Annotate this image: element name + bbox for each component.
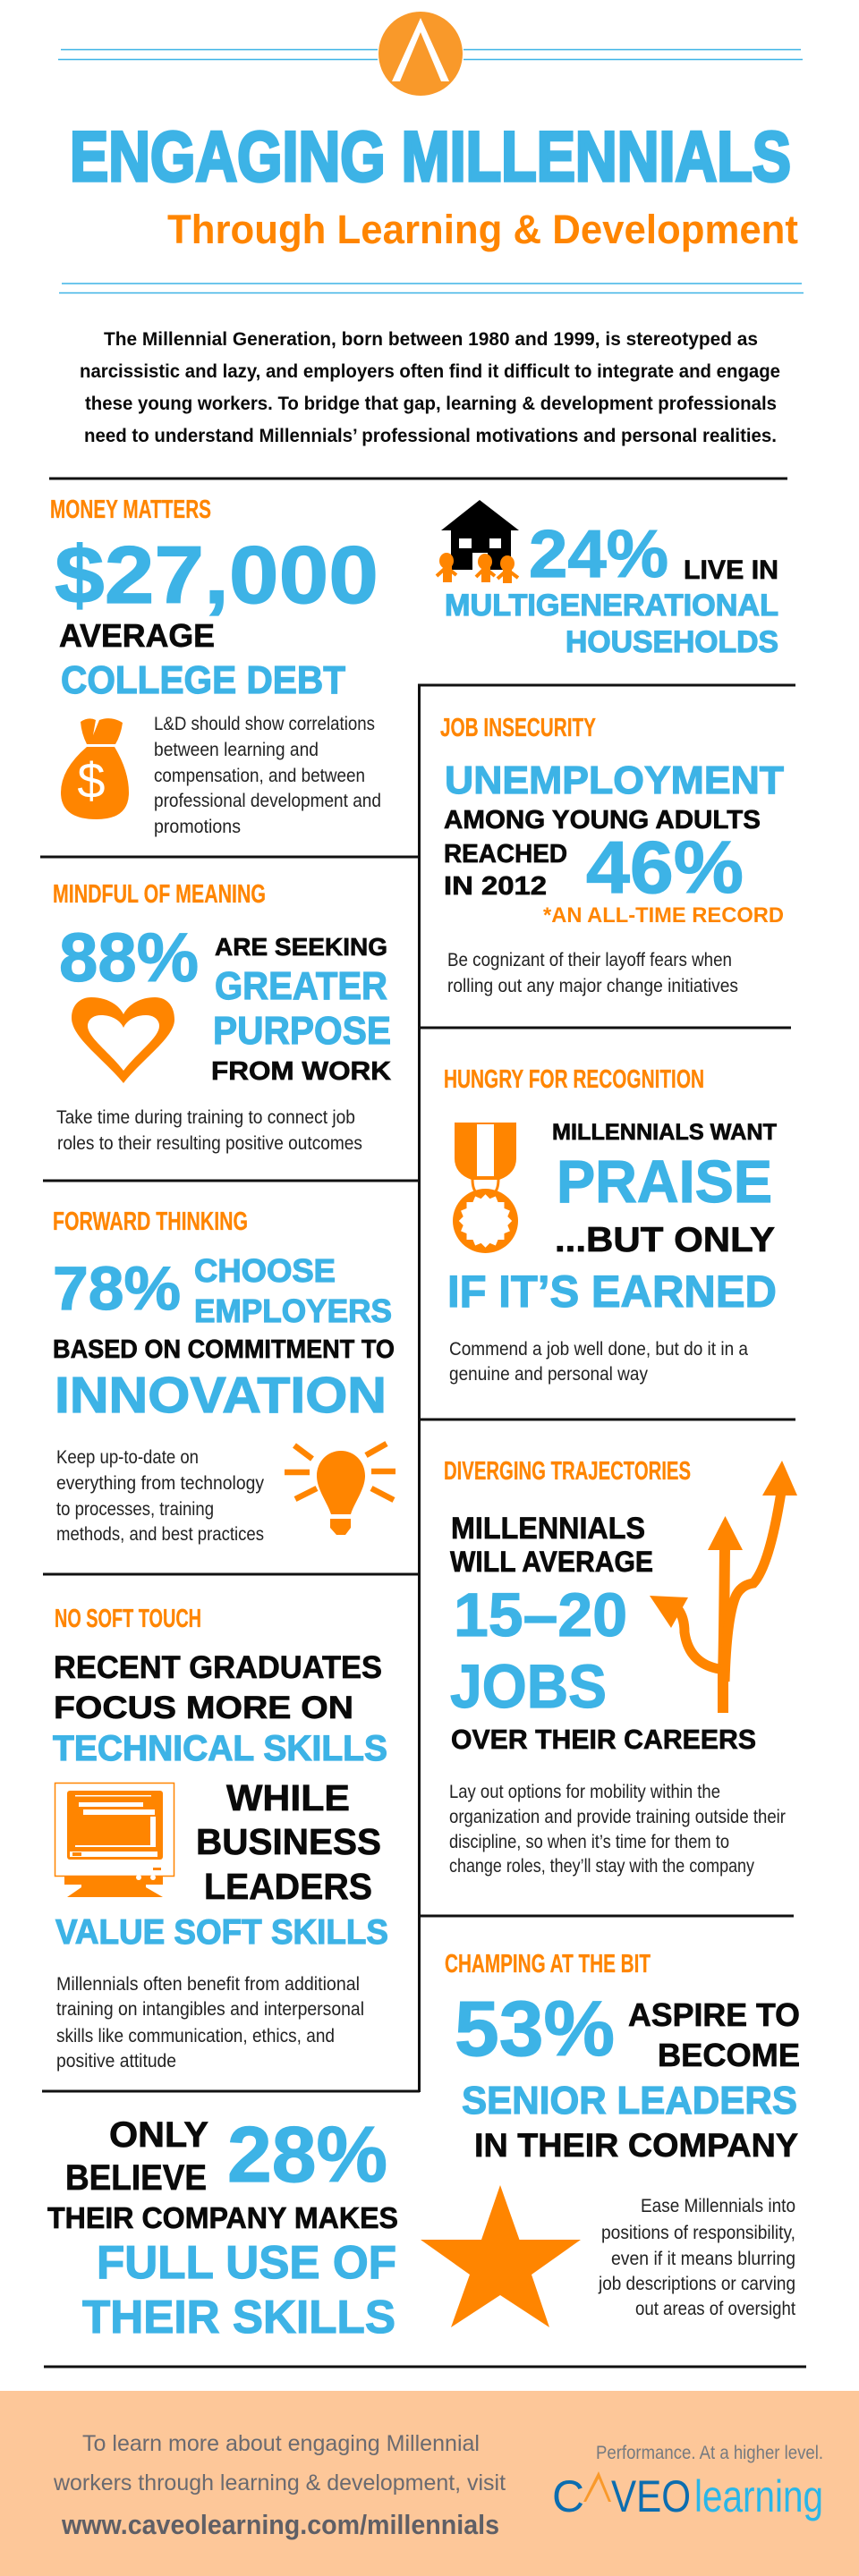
body text: money matters: promotions <box>154 817 241 837</box>
icon: money bag: $ <box>77 752 106 809</box>
body text: hungry for recognition <box>449 1339 748 1385</box>
label: from work: FROM WORK <box>211 1057 391 1086</box>
body text: diverging trajectories: discipline, so when it’s time for them to <box>449 1832 729 1852</box>
body text: forward thinking: methods, and best practices <box>56 1524 264 1545</box>
body text: money matters: L&D should show correlations <box>154 714 375 734</box>
label: multigenerational: MULTIGENERATIONAL <box>445 589 778 623</box>
stat: $27,000: $27,000 <box>55 530 378 621</box>
heading: mindful of meaning: MINDFUL OF MEANING <box>53 880 266 909</box>
label: employers: EMPLOYERS <box>194 1292 392 1329</box>
label: average: AVERAGE <box>59 617 215 654</box>
label: business: BUSINESS <box>196 1821 381 1862</box>
panel: money matters <box>50 496 381 837</box>
body text: job insecurity <box>447 950 738 996</box>
heading: hungry for recognition: HUNGRY FOR RECOGNITION <box>444 1065 704 1094</box>
icon: computer monitor <box>55 1784 174 1897</box>
intro text block: need to understand Millennials’ professional motivations and personal realities. <box>84 426 777 446</box>
panel: job insecurity <box>440 714 784 996</box>
label: purpose: PURPOSE <box>213 1009 391 1053</box>
label: households: HOUSEHOLDS <box>566 625 778 659</box>
body text: mindful of meaning: roles to their resulting positive outcomes <box>57 1133 362 1154</box>
note: all-time record: *AN ALL-TIME RECORD <box>543 903 784 928</box>
label: based on commitment to: BASED ON COMMITMENT TO <box>53 1335 395 1364</box>
body text: money matters <box>154 714 381 837</box>
label: millennials: MILLENNIALS <box>451 1512 645 1546</box>
label: technical skills: TECHNICAL SKILLS <box>53 1729 387 1768</box>
intro text block <box>80 329 780 446</box>
body text: no soft touch: skills like communication, ethics, and <box>56 2026 335 2046</box>
label: will average: WILL AVERAGE <box>450 1546 653 1578</box>
heading: forward thinking: FORWARD THINKING <box>53 1208 248 1236</box>
panel: diverging trajectories <box>444 1457 797 1877</box>
icon: diverging arrows <box>650 1461 797 1713</box>
body text: no soft touch: Millennials often benefit from additional <box>56 1974 360 1995</box>
intro text block: these young workers. To bridge that gap, learning & development professionals <box>85 394 777 414</box>
intro text block: narcissistic and lazy, and employers often find it difficult to integrate and engage <box>80 361 780 382</box>
body text: champing at the bit: even if it means blurring <box>611 2249 795 2269</box>
body text: champing at the bit: out areas of oversight <box>635 2299 795 2319</box>
label: but only: ...BUT ONLY <box>555 1221 775 1259</box>
heading: job insecurity: JOB INSECURITY <box>440 714 596 742</box>
label: live in: LIVE IN <box>684 555 778 585</box>
footer url: www.caveolearning.com/millennials <box>61 2509 499 2540</box>
panel: mindful of meaning <box>53 880 391 1154</box>
footer text: workers through learning & development, visit <box>53 2470 506 2496</box>
label: are seeking: ARE SEEKING <box>215 933 387 961</box>
label: full use of: FULL USE OF <box>97 2237 396 2289</box>
label: in 2012: IN 2012 <box>444 872 547 901</box>
body text: job insecurity: rolling out any major change initiatives <box>447 976 738 996</box>
label: senior leaders: SENIOR LEADERS <box>462 2079 797 2123</box>
label: become: BECOME <box>658 2037 800 2073</box>
body text: money matters: professional development and <box>154 791 381 811</box>
body text: no soft touch: positive attitude <box>56 2051 176 2072</box>
label: focus more on: FOCUS MORE ON <box>54 1690 353 1725</box>
tagline: Performance. At a higher level. <box>596 2443 823 2463</box>
body text: no soft touch: training on intangibles and interpersonal <box>56 1999 364 2020</box>
label: value soft skills: VALUE SOFT SKILLS <box>55 1913 388 1952</box>
label: college debt: COLLEGE DEBT <box>61 659 345 702</box>
stat: 15-20: 15–20 <box>454 1580 627 1649</box>
body text: money matters: compensation, and between <box>154 766 365 786</box>
heading: diverging trajectories: DIVERGING TRAJECTORIES <box>444 1457 691 1486</box>
panel: full use of skills <box>47 2110 398 2343</box>
body text: champing at the bit: Ease Millennials into <box>641 2196 795 2216</box>
label: their skills: THEIR SKILLS <box>82 2292 395 2343</box>
label: believe: BELIEVE <box>65 2158 207 2198</box>
logo: caveo learning: learning <box>694 2471 823 2521</box>
body text: champing at the bit: job descriptions or carving <box>598 2274 795 2294</box>
logo: caveo learning: C <box>552 2471 584 2521</box>
body text: champing at the bit <box>598 2196 795 2319</box>
label: aspire to: ASPIRE TO <box>628 1996 800 2033</box>
heading: no soft touch: NO SOFT TOUCH <box>55 1605 201 1633</box>
logo: caveo learning: VEO <box>611 2471 691 2521</box>
icon: money bag <box>61 718 129 819</box>
label: leaders: LEADERS <box>204 1866 372 1907</box>
icon: medal <box>453 1123 518 1253</box>
body text: mindful of meaning <box>56 1107 362 1154</box>
label: over their careers: OVER THEIR CAREERS <box>451 1724 756 1755</box>
body text: diverging trajectories: Lay out options for mobility within the <box>449 1782 720 1802</box>
panel: no soft touch <box>53 1605 388 2072</box>
body text: mindful of meaning: Take time during training to connect job <box>56 1107 355 1128</box>
icon: star <box>421 2185 581 2327</box>
label: among young adults: AMONG YOUNG ADULTS <box>444 806 761 835</box>
subtitle: Through Learning & Development <box>167 207 798 252</box>
icon: light bulb <box>285 1444 395 1535</box>
label: if it's earned: IF IT’S EARNED <box>447 1267 777 1317</box>
stat: 53%: 53% <box>455 1986 615 2072</box>
body text: hungry for recognition: Commend a job well done, but do it in a <box>449 1339 748 1360</box>
body text: no soft touch <box>56 1974 364 2072</box>
panel: multigenerational households <box>437 500 778 659</box>
label: unemployment: UNEMPLOYMENT <box>445 758 784 802</box>
label: only: ONLY <box>109 2115 208 2155</box>
heading: money matters: MONEY MATTERS <box>50 496 211 524</box>
panel: forward thinking <box>53 1208 395 1545</box>
label: reached: REACHED <box>444 840 567 869</box>
divider rules <box>40 478 806 2368</box>
label: their company makes: THEIR COMPANY MAKES <box>47 2201 398 2234</box>
body text: diverging trajectories: change roles, they’ll stay with the company <box>449 1856 754 1877</box>
icon: house with family <box>437 500 519 583</box>
body text: hungry for recognition: genuine and personal way <box>449 1364 648 1385</box>
panel: footer <box>0 2391 859 2576</box>
footer text: To learn more about engaging Millennial <box>82 2431 480 2456</box>
panel: champing at the bit <box>421 1950 800 2327</box>
stat: 28%: 28% <box>227 2110 387 2199</box>
stat: 46%: 46% <box>586 826 744 909</box>
body text: job insecurity: Be cognizant of their layoff fears when <box>447 950 732 970</box>
heading: champing at the bit: CHAMPING AT THE BIT <box>445 1950 651 1979</box>
label: choose: CHOOSE <box>194 1252 336 1289</box>
label: jobs: JOBS <box>450 1652 607 1721</box>
footer text <box>53 2431 506 2496</box>
label: in their company: IN THEIR COMPANY <box>474 2127 798 2164</box>
body text: champing at the bit: positions of responsibility, <box>601 2223 795 2243</box>
stat: 24%: 24% <box>529 516 668 591</box>
body text: money matters: between learning and <box>154 740 319 760</box>
body text: forward thinking: everything from technology <box>56 1473 264 1494</box>
body text: diverging trajectories: organization and provide training outside their <box>449 1807 786 1827</box>
stat: 78%: 78% <box>53 1254 181 1323</box>
label: while: WHILE <box>226 1777 350 1818</box>
header decorative lines <box>58 50 804 293</box>
intro text block: The Millennial Generation, born between 1980 and 1999, is stereotyped as <box>104 329 758 350</box>
label: millennials want: MILLENNIALS WANT <box>552 1120 777 1145</box>
panel: hungry for recognition <box>444 1065 777 1385</box>
label: praise: PRAISE <box>557 1148 772 1216</box>
label: greater: GREATER <box>215 964 387 1008</box>
body text: diverging trajectories <box>449 1782 786 1877</box>
stat: 88%: 88% <box>59 919 199 996</box>
logo: caveo learning <box>552 2471 823 2521</box>
label: recent graduates: RECENT GRADUATES <box>54 1650 382 1685</box>
body text: forward thinking: to processes, training <box>56 1499 214 1520</box>
body text: forward thinking <box>56 1447 264 1545</box>
icon: heart <box>72 997 174 1083</box>
body text: forward thinking: Keep up-to-date on <box>56 1447 199 1468</box>
label: innovation: INNOVATION <box>55 1367 387 1424</box>
icon: caveo logo badge <box>378 12 463 96</box>
